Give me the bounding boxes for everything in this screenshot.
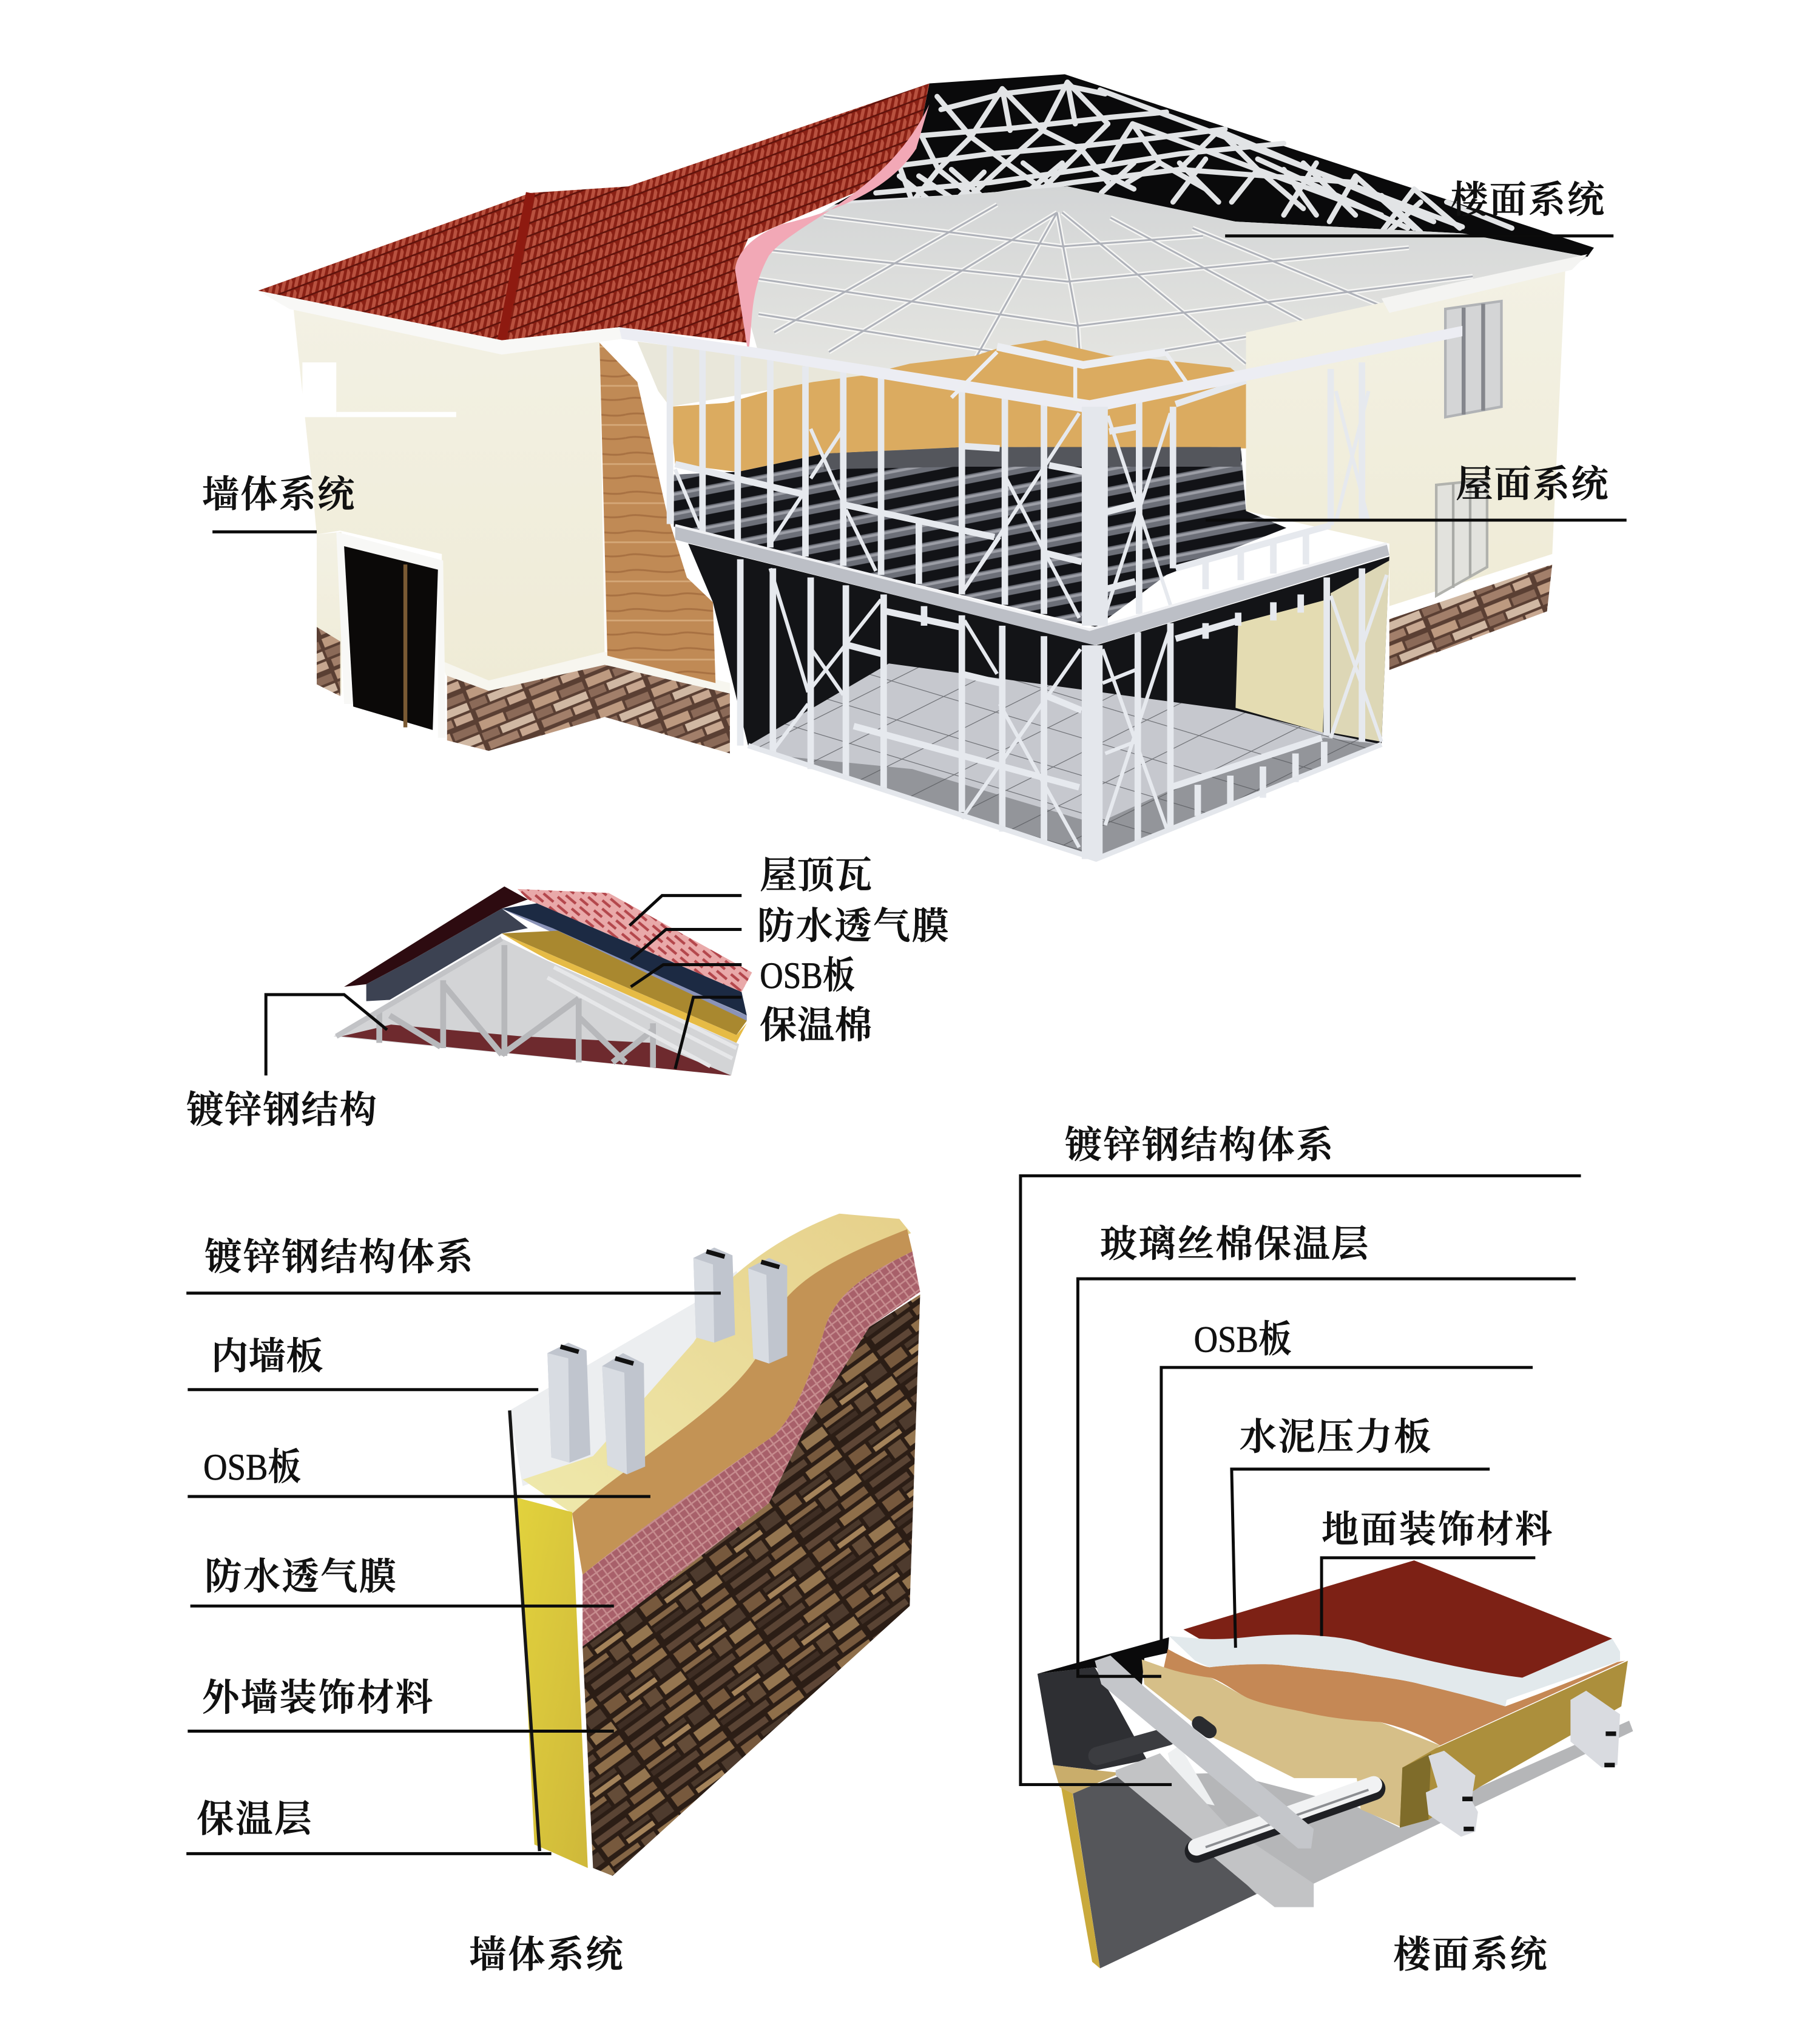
label: 内墙板: 内墙板 bbox=[211, 1336, 323, 1377]
black back edge bbox=[510, 1410, 539, 1851]
insulation top bbox=[522, 1214, 911, 1514]
floor finish bbox=[1183, 1560, 1612, 1677]
label: 镀锌钢结构体系 (wall): 镀锌钢结构体系 bbox=[204, 1237, 473, 1278]
cement board bbox=[1169, 1634, 1620, 1707]
OSB layer bbox=[572, 1230, 913, 1575]
roof eave beam bbox=[619, 326, 1462, 413]
stone cladding bbox=[582, 1294, 920, 1876]
roof section diagram bbox=[334, 887, 752, 1075]
label: 防水透气膜 bbox=[631, 906, 949, 959]
label: 屋面系统 (right): 屋面系统 bbox=[1456, 464, 1609, 505]
OSB layer bbox=[1164, 1649, 1626, 1745]
dark base panel bbox=[1073, 1776, 1257, 1968]
label: OSB板 (floor): OSB板 bbox=[1194, 1319, 1292, 1360]
lower steel flange bbox=[1116, 1753, 1314, 1907]
door bbox=[336, 532, 446, 738]
dark blue gable panel bbox=[366, 909, 528, 1001]
label: 保温层: 保温层 bbox=[197, 1799, 312, 1840]
steel frame: lower wall studs bbox=[740, 559, 1386, 847]
OSB layer bbox=[502, 931, 747, 1035]
glass wool top bbox=[1142, 1659, 1440, 1826]
black back edge bbox=[1038, 1637, 1169, 1687]
label: 镀锌钢结构体系 (floor) bbox=[1021, 1125, 1581, 1785]
interior board bbox=[510, 1271, 782, 1486]
interior: dark floor joists bbox=[674, 447, 1286, 627]
floor section diagram bbox=[1038, 1560, 1633, 1968]
window: upper bbox=[1445, 301, 1502, 417]
roof: translucent steel frame bbox=[735, 186, 1587, 405]
label: OSB板: OSB板 bbox=[760, 955, 855, 997]
interior: orange upper wall bbox=[670, 340, 1246, 472]
main house illustration bbox=[258, 74, 1594, 861]
right wall bbox=[1246, 254, 1587, 670]
truss base bbox=[334, 939, 739, 1075]
stone plinth: right bbox=[1389, 564, 1552, 670]
cream rear wall bbox=[1235, 600, 1327, 733]
yellow edge strip bbox=[1057, 1764, 1100, 1968]
label: OSB板 (floor) bbox=[1161, 1319, 1533, 1648]
label: 玻璃丝棉保温层 bbox=[1078, 1224, 1576, 1676]
label: 水泥压力板: 水泥压力板 bbox=[1240, 1417, 1431, 1458]
label: 玻璃丝棉保温层: 玻璃丝棉保温层 bbox=[1100, 1224, 1369, 1265]
label: 防水透气膜: 防水透气膜 bbox=[757, 906, 949, 947]
brackets bbox=[1426, 1691, 1620, 1836]
roof: exposed black underlay with truss bbox=[834, 74, 1594, 257]
caption: 墙体系统: 墙体系统 bbox=[469, 1934, 624, 1975]
label: OSB板 bbox=[631, 955, 855, 997]
tiled roof bbox=[258, 83, 930, 353]
tan patch bbox=[1053, 1765, 1121, 1794]
label: 镀锌钢结构体系 (floor): 镀锌钢结构体系 bbox=[1065, 1125, 1333, 1166]
steel studs bbox=[547, 1248, 787, 1474]
dark upper-left panel bbox=[1038, 1667, 1147, 1770]
label: 镀锌钢结构 bbox=[186, 995, 387, 1131]
label: 外墙装饰材料: 外墙装饰材料 bbox=[202, 1677, 433, 1719]
left wall bbox=[258, 291, 730, 754]
storey band beam bbox=[675, 526, 1389, 645]
insulation layer bbox=[502, 933, 747, 1043]
grey base plate bbox=[1121, 1721, 1633, 1894]
label: 保温棉 bbox=[675, 997, 872, 1069]
exposed wood sheathing bbox=[599, 343, 715, 683]
label: 地面装饰材料: 地面装饰材料 bbox=[1322, 1509, 1552, 1551]
lower room bbox=[688, 544, 1389, 861]
label: 保温棉: 保温棉 bbox=[760, 1005, 872, 1046]
label: 屋顶瓦: 屋顶瓦 bbox=[760, 855, 872, 896]
label: 水泥压力板 bbox=[1232, 1417, 1490, 1648]
label: 墙体系统 (left): 墙体系统 bbox=[202, 475, 356, 516]
insulation front face bbox=[1400, 1660, 1628, 1827]
tiled floor bbox=[748, 663, 1382, 859]
upper steel flange bbox=[1095, 1656, 1314, 1849]
label: OSB板 (wall): OSB板 bbox=[203, 1447, 301, 1488]
silver rod bbox=[1197, 1785, 1374, 1851]
bottom sill plate bbox=[748, 744, 1382, 859]
waterproof membrane bbox=[502, 904, 747, 1015]
interior: cream upper backdrop bbox=[637, 342, 913, 407]
dark gable fascia bbox=[344, 887, 528, 987]
window: lower bbox=[1436, 479, 1487, 596]
stone plinth: left bbox=[447, 662, 730, 754]
steel frame: upper wall studs bbox=[670, 343, 1368, 618]
roof tile layer bbox=[518, 889, 752, 992]
caption: 楼面系统: 楼面系统 bbox=[1393, 1934, 1548, 1975]
label: 楼面系统 (top right): 楼面系统 bbox=[1451, 180, 1605, 221]
label: 地面装饰材料 bbox=[1322, 1509, 1552, 1636]
wall section diagram bbox=[510, 1214, 920, 1876]
insulation end face bbox=[518, 1498, 588, 1868]
corner post bbox=[1082, 407, 1108, 859]
membrane layer bbox=[582, 1251, 920, 1646]
web strut and gap bbox=[1168, 1745, 1215, 1805]
dark rod bbox=[1098, 1724, 1209, 1756]
label: 屋顶瓦 bbox=[630, 855, 872, 926]
label: 防水透气膜 (wall): 防水透气膜 bbox=[204, 1556, 396, 1597]
label: 镀锌钢结构: 镀锌钢结构 bbox=[186, 1089, 377, 1131]
